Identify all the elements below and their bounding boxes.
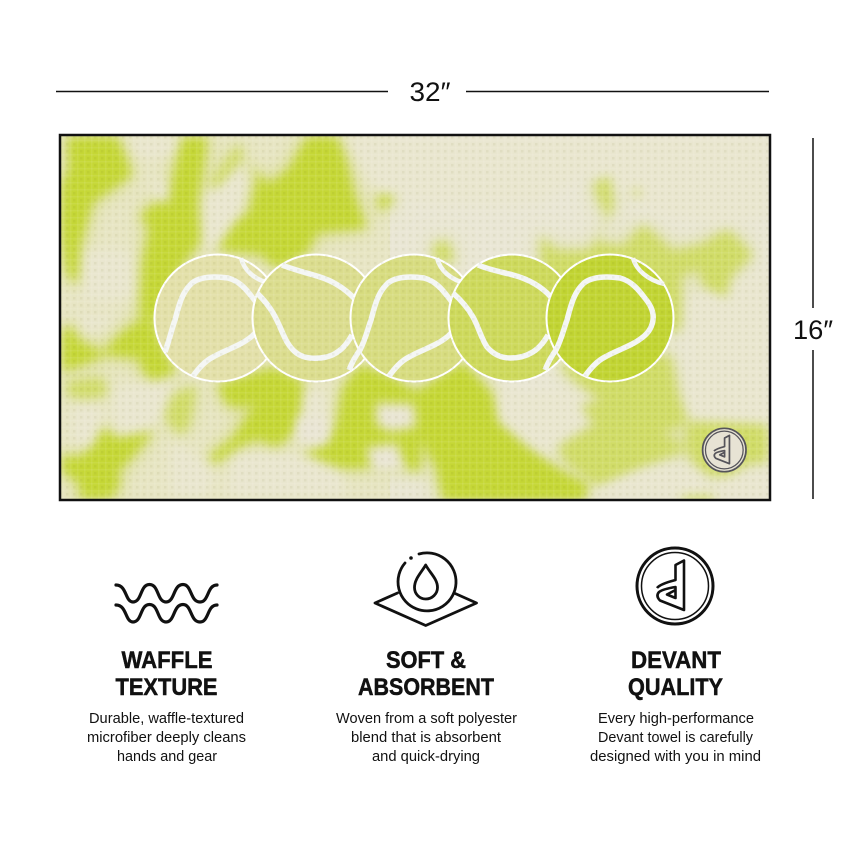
text: waffle texture description [87, 711, 246, 765]
heading: waffle texture: WAFFLE [122, 647, 212, 674]
heading: devant quality: DEVANT [631, 647, 721, 674]
heading: waffle texture [116, 647, 218, 701]
width dimension: 32 inches: 32″ [410, 77, 451, 107]
text: devant quality description: Devant towel is carefully [598, 730, 754, 746]
heading: soft and absorbent: SOFT & [386, 647, 466, 674]
text: soft and absorbent description: and quick-drying [372, 749, 480, 765]
icon: devant logo [637, 548, 713, 624]
ball 2 [252, 254, 380, 382]
towel logo badge [703, 428, 746, 472]
tennis balls [154, 254, 674, 382]
heading: soft and absorbent: ABSORBENT [358, 674, 494, 701]
text: devant quality description [590, 711, 761, 765]
height dimension: 16 inches: 16″ [793, 315, 833, 345]
text: waffle texture description: hands and gear [117, 749, 217, 765]
text: soft and absorbent description: blend that is absorbent [351, 730, 501, 746]
ball 1 [154, 254, 282, 382]
text: devant quality description: Every high-performance [598, 711, 754, 727]
heading: waffle texture: TEXTURE [116, 674, 218, 701]
towel border [60, 135, 770, 500]
text: waffle texture description: microfiber deeply cleans [87, 730, 246, 746]
panel: tie-dye towel [60, 135, 770, 502]
text: waffle texture description: Durable, waffle-textured [89, 711, 244, 727]
text: soft and absorbent description: Woven from a soft polyester [336, 711, 517, 727]
text: devant quality description: designed with you in mind [590, 749, 761, 765]
text: soft and absorbent description [336, 711, 517, 765]
heading: soft and absorbent [358, 647, 494, 701]
icon: absorbent drop [375, 553, 476, 626]
ball 5 [545, 254, 674, 382]
heading: devant quality [628, 647, 723, 701]
ball 4 [448, 254, 576, 382]
waffle texture overlay [60, 135, 770, 500]
icon: waffle waves [116, 584, 217, 622]
heading: devant quality: QUALITY [628, 674, 723, 701]
ball 3 [349, 254, 478, 382]
